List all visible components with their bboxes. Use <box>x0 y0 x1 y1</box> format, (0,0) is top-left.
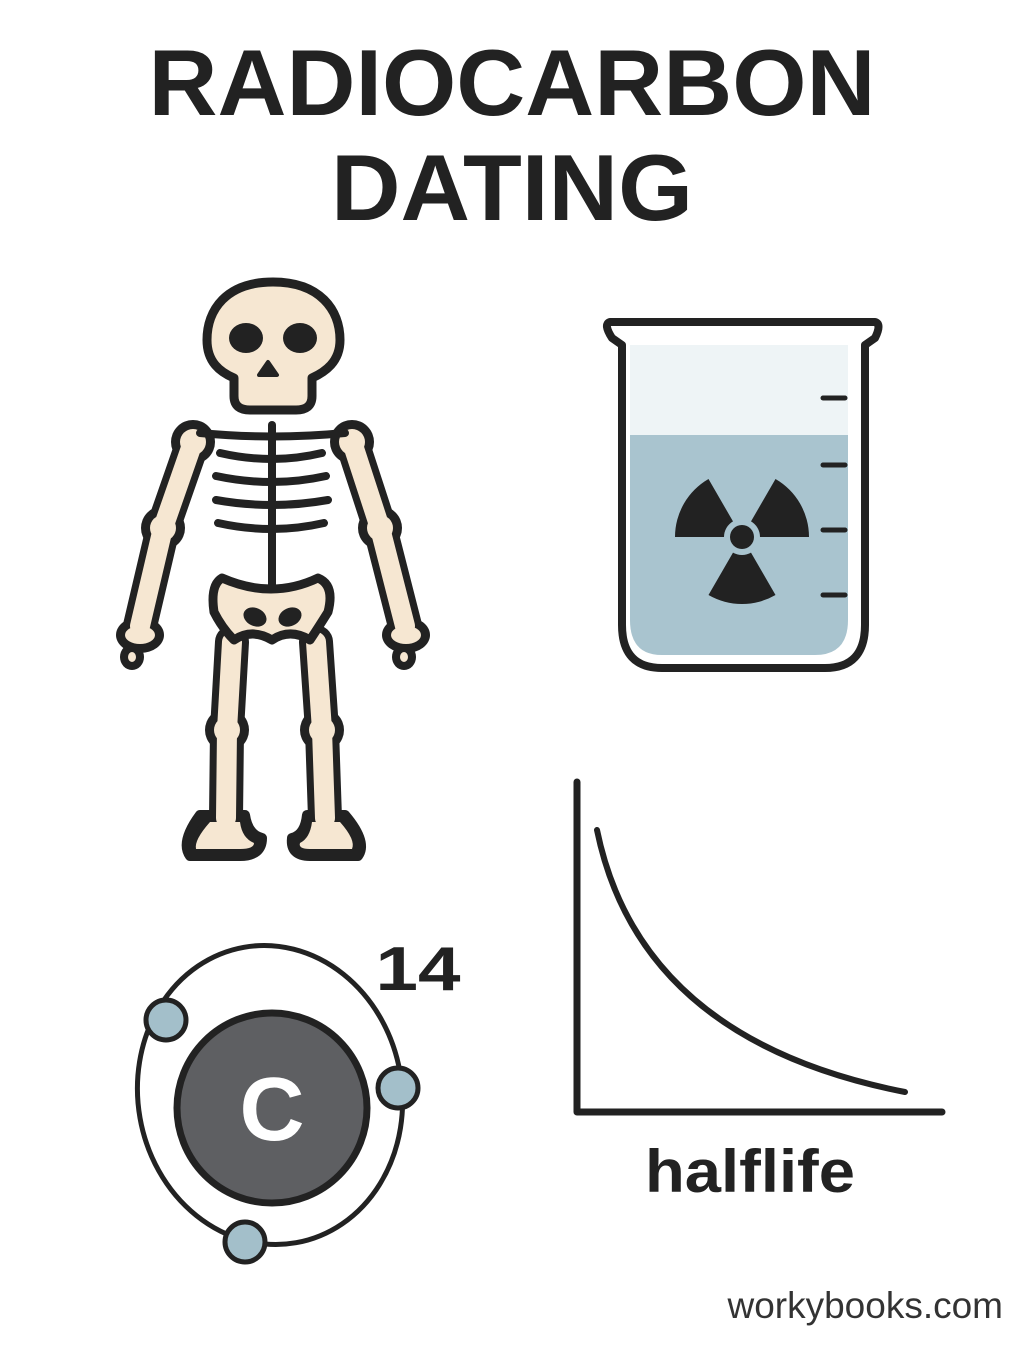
footer brand: workybooks.com <box>726 1285 1003 1326</box>
skull <box>207 282 340 410</box>
chart: halflife decay curve: halflife <box>645 1138 855 1205</box>
icon: beaker with radiation <box>607 322 878 668</box>
pelvis <box>213 578 330 640</box>
icon: carbon-14 atom <box>114 924 461 1266</box>
ribs and spine <box>200 425 345 590</box>
title: DATING <box>331 135 693 240</box>
icon: skeleton <box>116 282 430 856</box>
icon: carbon-14 atom: C <box>240 1060 304 1160</box>
icon: carbon-14 atom: 14 <box>376 935 461 1004</box>
title <box>148 30 876 240</box>
title: RADIOCARBON <box>148 30 876 135</box>
radiation symbol <box>675 479 809 604</box>
chart: halflife decay curve <box>577 782 942 1205</box>
